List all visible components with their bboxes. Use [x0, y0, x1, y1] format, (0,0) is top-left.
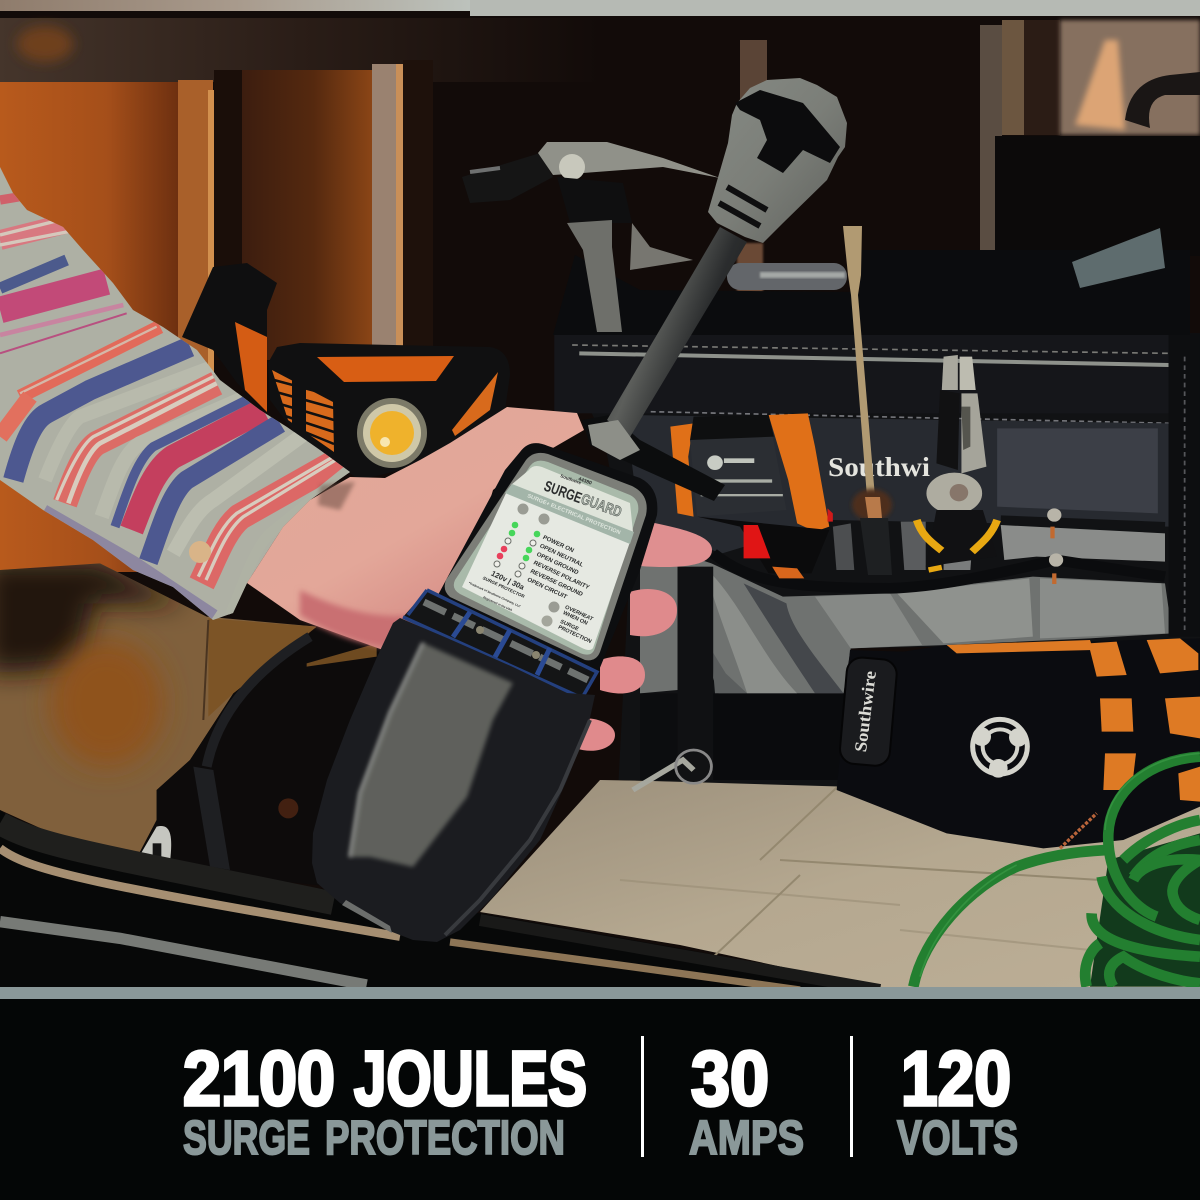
gloves [837, 638, 1200, 848]
spec: 120 volts: 120 [901, 1036, 1011, 1122]
device labels [464, 517, 630, 648]
van door sill [0, 810, 880, 990]
spec: 30 amps [689, 1036, 804, 1165]
device header logo: Southwire [560, 473, 582, 486]
surge protector housing [438, 443, 657, 675]
black strap behind plug collar [582, 415, 725, 501]
glove logo text: Southwire [851, 669, 880, 753]
spec: 2100 joules [183, 1036, 587, 1165]
hand holding device [247, 407, 712, 751]
protective cover [312, 618, 595, 942]
pliers [917, 355, 997, 570]
device labels: OPEN NEUTRAL [538, 543, 585, 569]
worklight with lens [268, 343, 510, 480]
black cable coil [138, 628, 383, 887]
device header logo: SURGE [542, 478, 584, 507]
glove logo [972, 719, 1028, 778]
spec: 30 amps: AMPS [689, 1112, 804, 1165]
surge protector face panel [454, 461, 638, 655]
orange thermometer tool [670, 413, 833, 578]
device labels: Registered in the USA [482, 595, 514, 612]
spec: 2100 joules: PROTECTION [325, 1112, 565, 1165]
device labels: REVERSE GROUND [529, 569, 584, 598]
device labels: *Trademark of Southwire Company, LLC [468, 581, 522, 609]
floor seams [620, 775, 1100, 960]
bag handle shadow band [553, 250, 1190, 335]
device labels: OPEN GROUND [535, 552, 580, 576]
device header logo: 44380 [577, 476, 593, 487]
spec: 120 volts [897, 1036, 1018, 1165]
device labels: REVERSE POLARITY [532, 560, 590, 591]
hammers behind the plug [462, 142, 1165, 332]
bottom spec panel [0, 999, 1200, 1200]
blue hinge frame [403, 590, 597, 698]
device labels: SURGE [559, 619, 580, 633]
device labels: OPEN CIRCUIT [526, 577, 568, 601]
screwdriver [843, 226, 892, 575]
rear work light stand [182, 263, 277, 413]
spec: 30 amps: 30 [691, 1036, 769, 1122]
floor [480, 780, 1200, 990]
indicator lights [494, 504, 560, 626]
spec: 2100 joules: 2100 [183, 1036, 335, 1122]
bag logo text: Southwi [828, 452, 931, 482]
tool bag [554, 333, 1200, 790]
device labels: SURGE PROTECTOR [482, 576, 526, 599]
spec: 2100 joules: JOULES [354, 1036, 587, 1122]
device labels: OVERHEAT [564, 605, 594, 623]
device header logo [526, 473, 624, 536]
spec: 2100 joules: SURGE [183, 1112, 310, 1165]
lower pocket [640, 540, 1172, 693]
device header logo: GUARD [579, 491, 624, 521]
divider [641, 1036, 644, 1157]
wood stump [0, 560, 320, 860]
power cord stem and plug head [588, 78, 847, 460]
device header logo: SURGE+ ELECTRICAL PROTECTION [526, 493, 621, 536]
device labels: 120v | 30a [489, 569, 527, 592]
device labels: WHEN ON [561, 610, 589, 627]
green extension cord coil [913, 753, 1200, 987]
divider [850, 1036, 853, 1157]
device labels: POWER ON [541, 535, 575, 554]
plaid shirt sleeve [0, 160, 360, 630]
bottom band divider [0, 987, 1200, 999]
spec: 120 volts: VOLTS [897, 1112, 1018, 1165]
device labels: PROTECTION [557, 625, 592, 645]
